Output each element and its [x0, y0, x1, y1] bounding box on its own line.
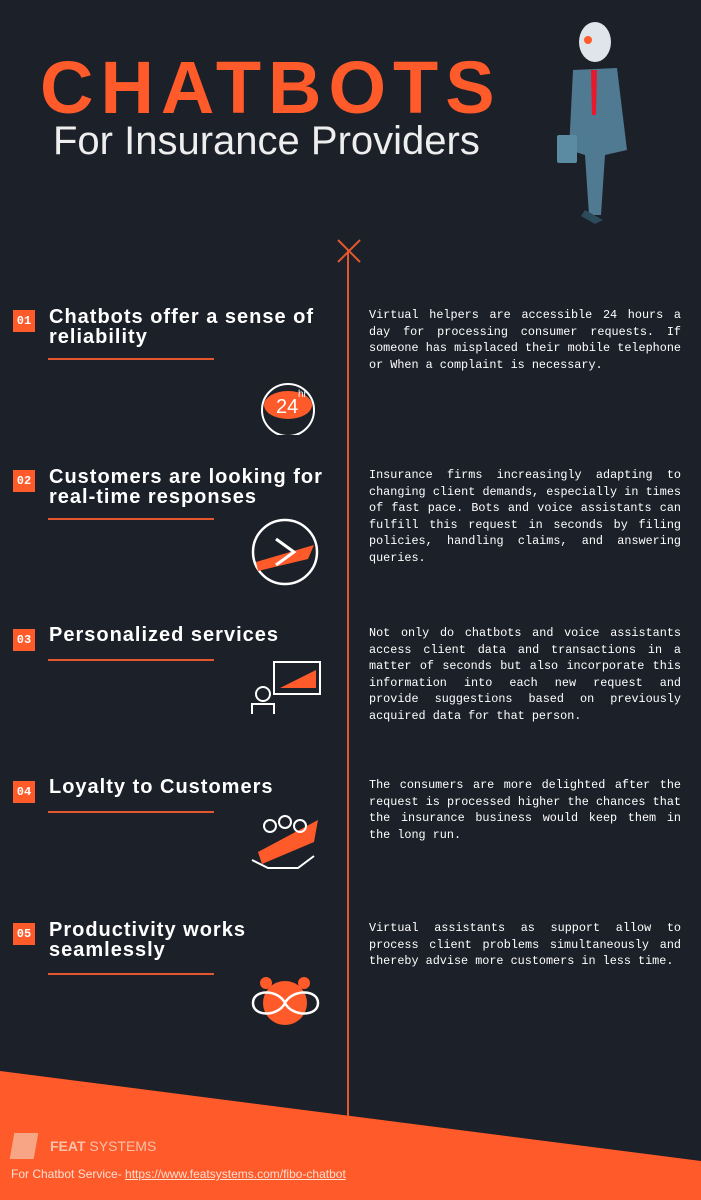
- icon: 24hr: hr: [298, 389, 308, 400]
- section 02: changing client demands, especially in times: [369, 485, 681, 499]
- section 02: Customers are looking for: [49, 466, 323, 488]
- section 01: 01: [17, 314, 31, 328]
- footer logo: [10, 1133, 156, 1159]
- section 04: 04: [17, 785, 31, 799]
- section 04: [13, 776, 681, 869]
- footer logo: FEAT SYSTEMS: [50, 1138, 156, 1154]
- section 03: access client data and transactions in a: [369, 643, 681, 657]
- section 02: queries.: [369, 551, 426, 565]
- section 02: [13, 466, 681, 586]
- icon: 24hr: [261, 383, 315, 435]
- section 02: policies, handling claims, and answering: [369, 534, 681, 548]
- section 03: 03: [17, 633, 31, 647]
- section 01: day for processing consumer requests. If: [369, 325, 681, 339]
- section 03: acquired data for that person.: [369, 709, 581, 723]
- section 04: The consumers are more delighted after the: [369, 778, 681, 792]
- section 01: [13, 306, 681, 435]
- title: CHATBOTS: [40, 46, 502, 129]
- subtitle: For Insurance Providers: [53, 119, 480, 163]
- section 04: the insurance business would keep them in: [369, 811, 681, 825]
- section 03: matter of seconds but also incorporate this: [369, 659, 681, 673]
- section 01: Virtual helpers are accessible 24 hours a: [369, 308, 681, 322]
- section 04: the long run.: [369, 828, 461, 842]
- section 03: [13, 624, 681, 723]
- section 02: real-time responses: [49, 486, 257, 508]
- icon: x mark: [337, 239, 361, 263]
- section 03: Not only do chatbots and voice assistants: [369, 626, 681, 640]
- section 05: [13, 919, 681, 1025]
- icon: 24hr: 24: [276, 396, 298, 418]
- section 05: 05: [17, 927, 31, 941]
- section 02: Insurance firms increasingly adapting to: [369, 468, 681, 482]
- section 05: Productivity works: [49, 919, 246, 941]
- section 05: process client problems simultaneously and: [369, 938, 681, 952]
- section 05: seamlessly: [49, 939, 166, 961]
- section 01: someone has misplaced their mobile telephone: [369, 341, 681, 355]
- robot illustration: [557, 22, 627, 224]
- section 01: Chatbots offer a sense of: [49, 306, 314, 328]
- section 05: Virtual assistants as support allow to: [369, 921, 681, 935]
- footer link: For Chatbot Service- https://www.featsystems.com/fibo-chatbot: [11, 1167, 346, 1181]
- section 03: provide suggestions based on previously: [369, 692, 681, 706]
- section 04: request is processed higher the chances that: [369, 795, 681, 809]
- section 02: of fast pace. Bots and voice assistants can: [369, 501, 681, 515]
- section 04: Loyalty to Customers: [49, 776, 273, 798]
- timeline: [347, 250, 349, 1118]
- section 05: thereby advise more customers in less time.: [369, 954, 673, 968]
- section 03: Personalized services: [49, 624, 279, 646]
- section 01: or When a complaint is necessary.: [369, 358, 603, 372]
- section 01: reliability: [49, 326, 148, 348]
- section 02: 02: [17, 474, 31, 488]
- section 02: fulfill this request in seconds by filing: [369, 518, 681, 532]
- section 03: information into each new request and: [369, 676, 681, 690]
